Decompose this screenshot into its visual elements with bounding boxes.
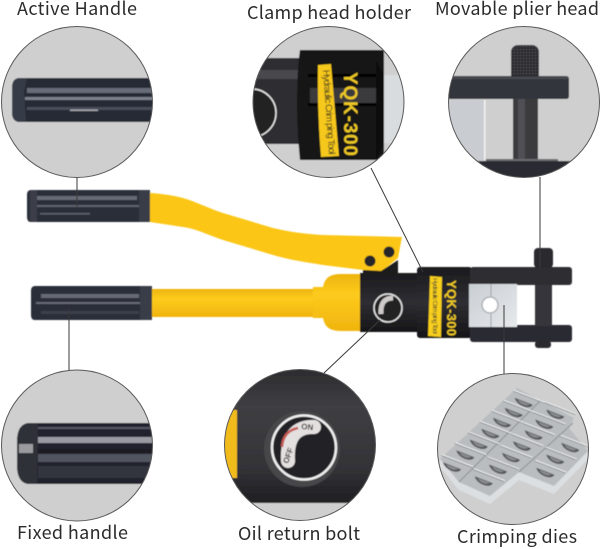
leader: movable plier head xyxy=(539,177,541,268)
circle: clamp head holder detail: Hydraulic Crim ping Tool xyxy=(320,69,337,155)
yellow collar and cylinder xyxy=(313,274,361,331)
label: Oil return bolt: Oil return bolt xyxy=(238,520,360,546)
lower plate xyxy=(478,160,570,177)
silver die xyxy=(446,100,485,165)
silver die xyxy=(384,75,404,143)
active handle yellow arm xyxy=(150,193,402,272)
die pieces row 1 xyxy=(441,390,545,472)
hydraulic crimping tool xyxy=(27,190,572,348)
fixed handle yellow tube xyxy=(152,289,317,317)
cylinder body xyxy=(254,58,300,144)
on text: ON xyxy=(301,422,314,432)
leader: fixed handle xyxy=(68,308,70,371)
yellow strip xyxy=(318,64,339,157)
on off band xyxy=(288,427,314,461)
block seams xyxy=(459,400,573,482)
circle: clamp head holder detail xyxy=(252,26,404,178)
circle: movable plier head detail xyxy=(446,26,600,181)
crimping die xyxy=(469,284,517,327)
off text: OFF xyxy=(281,446,295,465)
active handle grip xyxy=(27,190,150,222)
lever link xyxy=(363,246,398,273)
pump release dial xyxy=(374,294,402,322)
circle: active handle detail xyxy=(1,26,157,178)
crimp head xyxy=(417,248,572,348)
model number: YQK-300 xyxy=(444,280,459,336)
circle: crimping dies detail xyxy=(437,373,592,525)
circle: fixed handle detail xyxy=(1,370,156,522)
knurled knob xyxy=(511,45,539,81)
fixed handle grip xyxy=(31,286,152,320)
pin xyxy=(513,99,538,163)
leader: crimping dies xyxy=(503,305,505,374)
die stack top surface xyxy=(440,388,588,496)
die pieces row 2 xyxy=(523,402,577,440)
bolt knob xyxy=(264,411,340,487)
yellow collar xyxy=(225,409,238,479)
label: Fixed handle: Fixed handle xyxy=(17,519,128,545)
die pieces middle xyxy=(473,433,544,486)
dial edge xyxy=(254,88,278,136)
plate xyxy=(446,76,569,99)
die stack side faces xyxy=(440,451,588,504)
leader: active handle xyxy=(76,177,78,207)
leader: clamp head holder xyxy=(371,168,423,272)
red arrow xyxy=(282,428,298,447)
model number: YQK-300 xyxy=(339,72,360,156)
yellow model strip xyxy=(428,276,442,337)
circle: oil return bolt detail xyxy=(220,365,380,521)
die pieces row 3 xyxy=(534,435,592,477)
leader: oil return bolt xyxy=(324,320,380,373)
cylinder body xyxy=(232,370,375,504)
black cylinder body xyxy=(360,273,422,332)
head block xyxy=(297,50,384,160)
label: Crimping dies: Crimping dies xyxy=(457,523,577,549)
strip text: Hydraulic Crim ping Tool xyxy=(431,278,438,335)
